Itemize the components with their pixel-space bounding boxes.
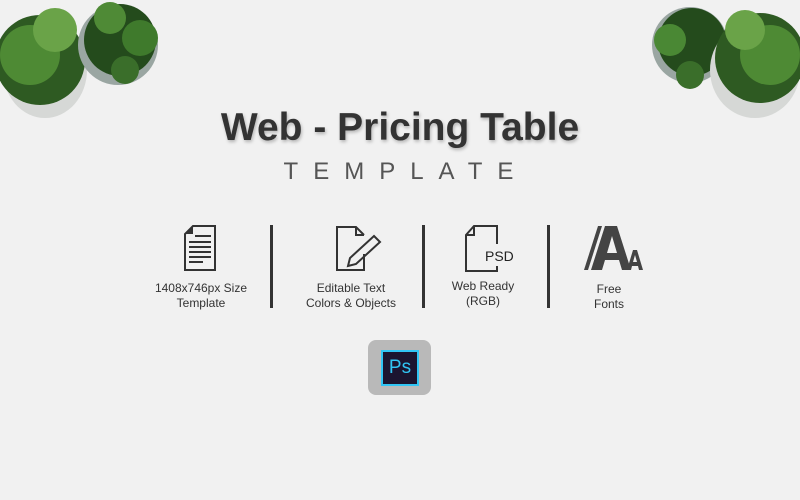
- label 3: (RGB): [466, 294, 500, 308]
- icon: photoshop: [368, 340, 431, 395]
- label 3: [452, 279, 514, 308]
- icon: photoshop: Ps: [389, 357, 411, 378]
- label 2: [306, 281, 396, 310]
- title: Web - Pricing Table: [221, 106, 579, 149]
- icon: fonts: [584, 226, 643, 270]
- plant: top right: [652, 7, 800, 118]
- label 3: Web Ready: [452, 279, 514, 293]
- label 2: Editable Text: [317, 281, 385, 295]
- label 2: Colors & Objects: [306, 296, 396, 310]
- label 4: [594, 282, 624, 311]
- icon: edit: [336, 226, 382, 271]
- label 1: [155, 281, 247, 310]
- label 4: Fonts: [594, 297, 624, 311]
- icon: PSD file: [465, 225, 514, 272]
- label 1: 1408x746px Size: [155, 281, 247, 295]
- plant: top left: [0, 2, 158, 118]
- label 4: Free: [597, 282, 621, 296]
- subtitle: TEMPLATE: [284, 158, 528, 185]
- label 1: Template: [177, 296, 225, 310]
- icon: document: [184, 225, 216, 271]
- icon: PSD file: PSD: [485, 248, 514, 264]
